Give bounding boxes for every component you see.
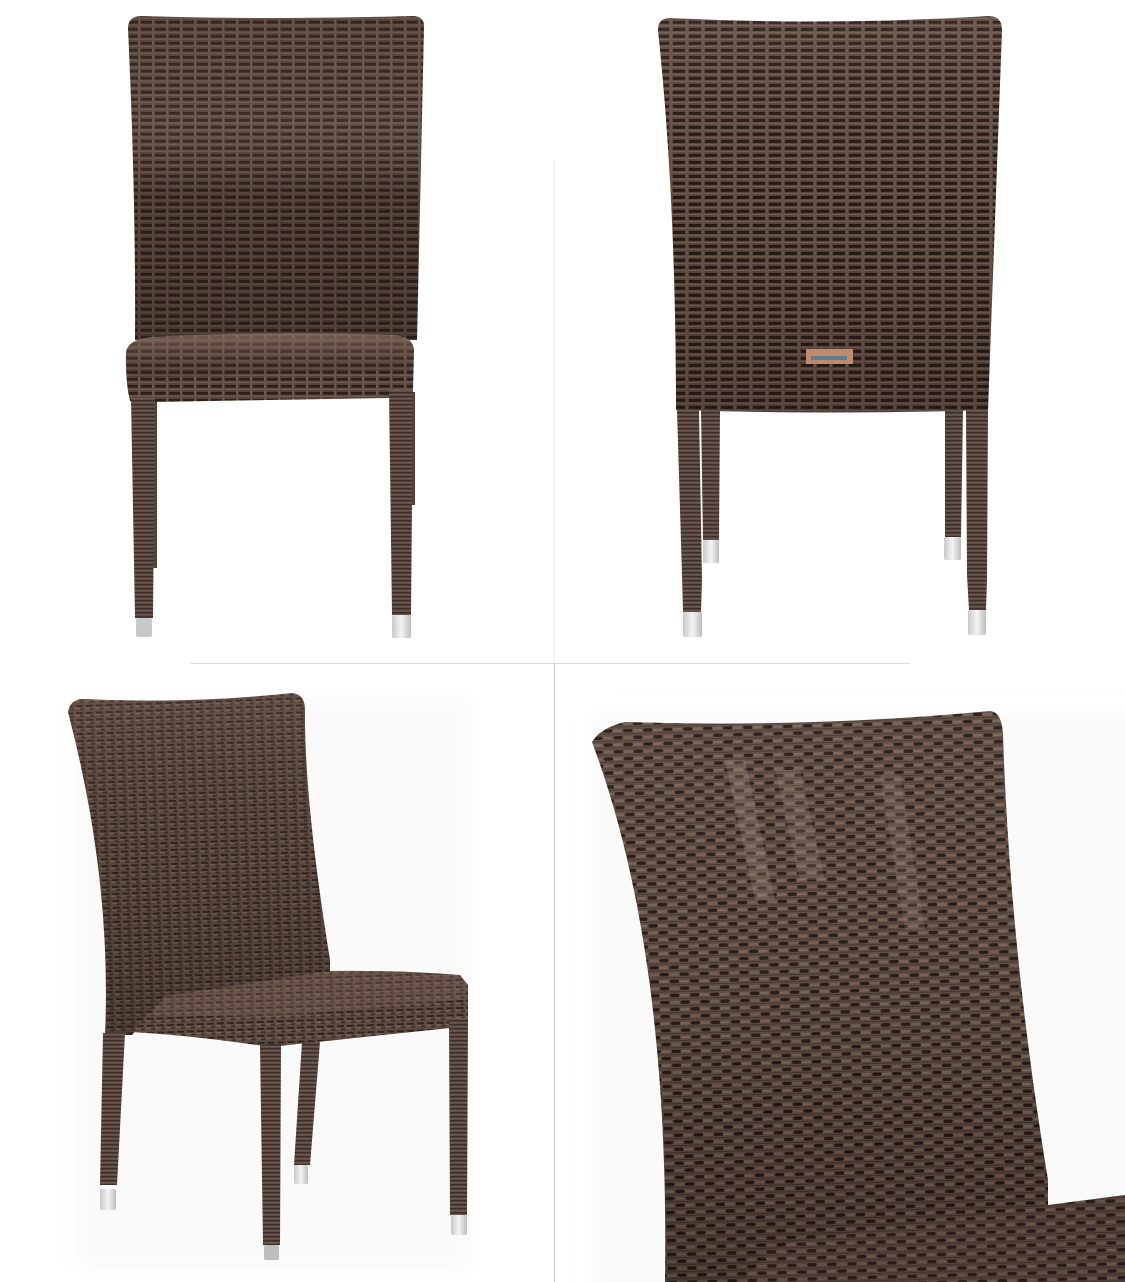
chair: rear view xyxy=(658,16,1002,637)
backdrop: lower-left photo xyxy=(76,698,470,1268)
right leg xyxy=(449,1018,468,1235)
front legs xyxy=(677,410,988,637)
chair: close-up of backrest xyxy=(592,711,1125,1282)
seat xyxy=(126,333,414,402)
backrest xyxy=(68,693,330,1035)
backrest xyxy=(592,711,1048,1282)
backrest xyxy=(128,16,424,340)
front left leg xyxy=(131,398,155,637)
seat xyxy=(745,1195,1125,1282)
left leg xyxy=(100,1033,125,1210)
backdrop: lower-right photo xyxy=(593,713,1125,1282)
seat xyxy=(130,971,468,1047)
light streaks xyxy=(725,760,925,930)
maker tag xyxy=(806,349,853,364)
chair: front view xyxy=(126,16,424,638)
divider lines xyxy=(190,160,910,1282)
rear leg xyxy=(294,1042,320,1184)
backrest xyxy=(658,16,1002,412)
rear legs xyxy=(150,392,415,568)
rear legs xyxy=(701,410,963,563)
front right leg xyxy=(389,390,413,638)
chair: three-quarter view xyxy=(68,693,468,1260)
centre leg xyxy=(260,1043,281,1260)
